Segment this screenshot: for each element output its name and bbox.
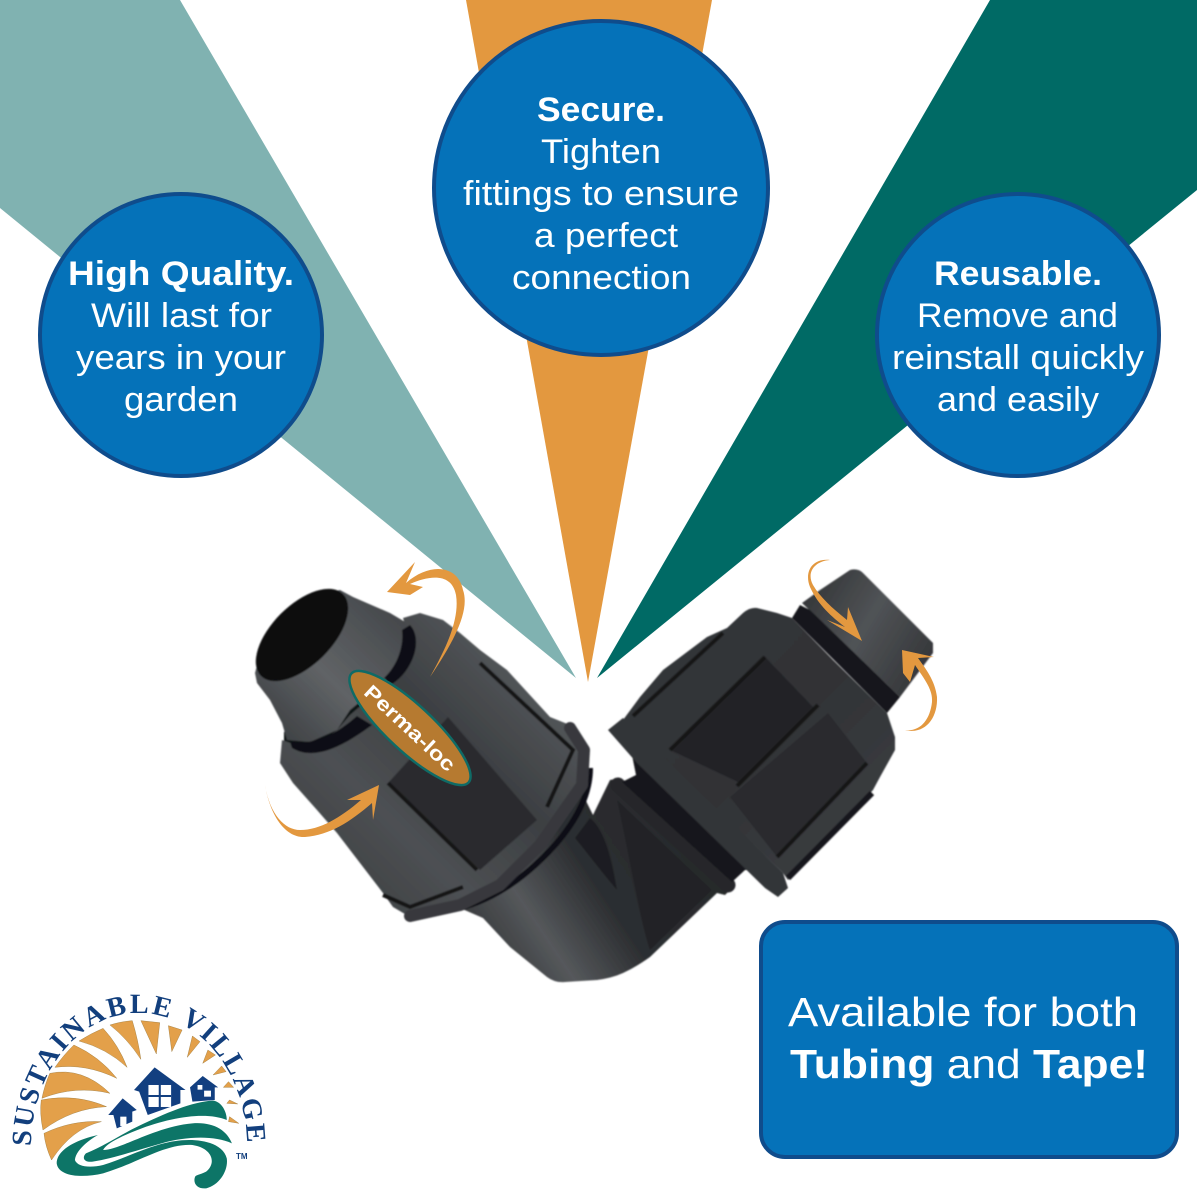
panel: Secure circle: connection bbox=[512, 259, 691, 297]
arrow: bottom left bbox=[265, 785, 379, 837]
right nut grooves bbox=[633, 633, 867, 857]
panel: Reusable circle: reinstall quickly bbox=[892, 339, 1144, 377]
beam: dark green bbox=[597, 0, 1197, 678]
panel: Reusable circle: Reusable. bbox=[934, 255, 1102, 293]
panel: Secure circle bbox=[434, 21, 768, 355]
right flange bbox=[608, 718, 788, 897]
logo wordmark bbox=[31, 1013, 247, 1146]
logo: Sustainable Village: TM bbox=[236, 1152, 248, 1161]
logo: Sustainable Village: SUSTAINABLE VILLAGE bbox=[12, 994, 266, 1145]
panel: Secure circle: Secure. bbox=[537, 91, 665, 129]
elbow body bbox=[460, 778, 733, 982]
right neck bbox=[622, 745, 760, 882]
panel: Secure circle: fittings to ensure bbox=[463, 175, 739, 213]
left spigot bbox=[255, 590, 410, 742]
left neck underlay bbox=[284, 665, 410, 756]
panel: availability callout bbox=[761, 922, 1177, 1157]
beam: orange bbox=[466, 0, 712, 682]
logo houses bbox=[108, 1067, 218, 1128]
arrow: right lower bbox=[902, 650, 937, 731]
right spigot bbox=[802, 569, 933, 697]
product photo: elbow fitting bbox=[240, 569, 933, 982]
panel: Reusable circle bbox=[877, 194, 1159, 476]
left nut bbox=[280, 613, 587, 917]
badge: Perma-loc bbox=[336, 657, 484, 799]
panel: Reusable circle: and easily bbox=[937, 381, 1099, 419]
logo green waves bbox=[57, 1101, 232, 1188]
panel: High Quality circle: Will last for bbox=[91, 297, 272, 335]
left nut grooves bbox=[383, 663, 573, 907]
panel: High Quality circle: garden bbox=[124, 381, 238, 419]
logo sun rays bbox=[41, 1021, 239, 1160]
left opening bbox=[240, 573, 364, 697]
right nut recess panels bbox=[670, 657, 813, 783]
arrow: top left bbox=[387, 562, 465, 677]
panel: Secure circle: a perfect bbox=[534, 217, 679, 255]
left flange bbox=[460, 768, 590, 908]
arrow: right upper bbox=[808, 560, 862, 641]
right ring bbox=[792, 605, 900, 713]
badge: Perma-loc: Perma-loc bbox=[359, 681, 459, 776]
left nut recess bbox=[388, 717, 537, 870]
panel: High Quality circle bbox=[40, 194, 322, 476]
elbow crease bbox=[575, 818, 617, 890]
left neck ring bbox=[384, 625, 416, 684]
right nut bbox=[623, 608, 895, 880]
right collar bbox=[618, 785, 728, 885]
panel: Secure circle: Tighten bbox=[541, 133, 661, 171]
panel: Reusable circle: Remove and bbox=[917, 297, 1118, 335]
panel: High Quality circle: years in your bbox=[76, 339, 286, 377]
panel: availability callout: Available for both bbox=[788, 989, 1138, 1035]
panel: availability callout: Tubing and Tape! bbox=[790, 1041, 1148, 1087]
panel: High Quality circle: High Quality. bbox=[68, 255, 294, 293]
beam: teal bbox=[0, 0, 576, 678]
